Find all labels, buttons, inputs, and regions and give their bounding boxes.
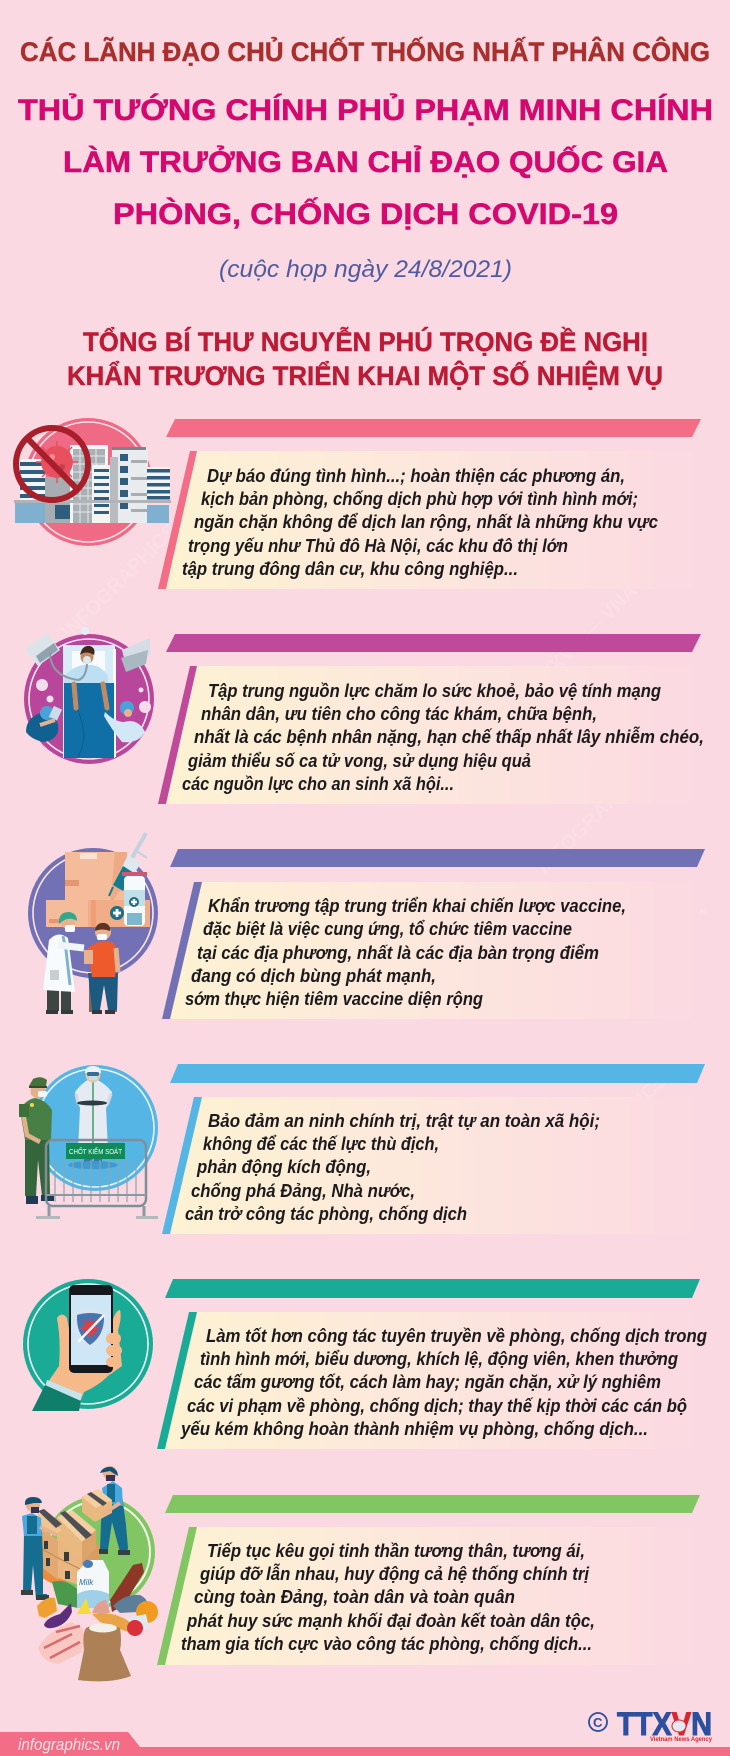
body text: phản động kích động, (196, 1156, 371, 1177)
body text: cùng toàn Đảng, toàn dân và toàn quân (194, 1586, 515, 1607)
subheading (67, 326, 663, 391)
icon: city with virus prohibition (14, 418, 171, 546)
body text (181, 1540, 595, 1654)
icon: workers with boxes and food: Milk (79, 1578, 94, 1587)
text box (170, 1097, 700, 1234)
colour bar (166, 419, 701, 437)
title: kicker: CÁC LÃNH ĐẠO CHỦ CHỐT THỐNG NHẤT PHÂN CÔNG (20, 35, 710, 67)
footer band (0, 1732, 730, 1756)
colour bar (166, 634, 701, 652)
body text: ngăn chặn không để dịch lan rộng, nhất là những khu vực (194, 511, 659, 532)
body text: giúp đỡ lẫn nhau, huy động cả hệ thống chính trị (199, 1563, 590, 1584)
date note: (cuộc họp ngày 24/8/2021) (219, 256, 512, 283)
text box (166, 666, 700, 804)
body text: đặc biệt là việc cung ứng, tổ chức tiêm vaccine (203, 918, 572, 939)
subheading: KHẨN TRƯƠNG TRIỂN KHAI MỘT SỐ NHIỆM VỤ (67, 359, 663, 391)
colour bar (165, 1279, 700, 1298)
left accent (162, 1097, 202, 1234)
body text: Dự báo đúng tình hình...; hoàn thiện các phương án, (207, 465, 625, 486)
body text: nhân dân, ưu tiên cho công tác khám, chữa bệnh, (201, 703, 597, 724)
title: main headline: LÀM TRƯỞNG BAN CHỈ ĐẠO QUỐC GIA (63, 145, 668, 179)
body text: tập trung đông dân cư, khu công nghiệp... (182, 558, 518, 579)
body text: phát huy sức mạnh khối đại đoàn kết toàn dân tộc, (186, 1610, 595, 1631)
body text: yếu kém không hoàn thành nhiệm vụ phòng, chống dịch... (180, 1418, 648, 1439)
icon: patient in hospital bed (24, 627, 154, 764)
logo: TTXVN: C (593, 1715, 603, 1730)
icon: checkpoint with guard and medic (19, 1065, 158, 1219)
icon: vaccination scene (28, 833, 158, 1014)
text box (166, 451, 700, 589)
body text: đang có dịch bùng phát mạnh, (191, 965, 436, 986)
body text (182, 680, 704, 794)
text: INFOGRAPHICS (548, 1070, 672, 1194)
left accent (158, 666, 197, 804)
subheading: TỔNG BÍ THƯ NGUYỄN PHÚ TRỌNG ĐỀ NGHỊ (83, 326, 648, 357)
body text: tình hình mới, biểu dương, khích lệ, động viên, khen thưởng (200, 1348, 678, 1369)
colour bar (170, 1064, 705, 1083)
panel 1: forecasting (158, 419, 701, 589)
body text: các nguồn lực cho an sinh xã hội... (182, 773, 454, 794)
body text: sớm thực hiện tiêm vaccine diện rộng (185, 988, 483, 1009)
icon: hand holding phone with shield (23, 1279, 153, 1411)
colour bar (170, 849, 705, 867)
body text (185, 895, 626, 1009)
text: INFOGRAPHICS (533, 755, 657, 879)
panel 5: communications (157, 1279, 707, 1449)
left accent (157, 1312, 197, 1449)
colour bar (165, 1495, 700, 1513)
text: TTXVN — VNA (28, 1105, 142, 1219)
body text: kịch bản phòng, chống dịch phù hợp với tình hình mới; (201, 488, 638, 509)
text: TTXVN — VNA (528, 580, 642, 694)
body text (182, 465, 659, 579)
body text: Khẩn trương tập trung triển khai chiến lược vaccine, (208, 895, 626, 916)
footer source: infographics.vn (18, 1735, 120, 1754)
body text: Tập trung nguồn lực chăm lo sức khoẻ, bảo vệ tính mạng (208, 680, 661, 701)
text box (165, 1312, 700, 1449)
left accent (162, 882, 202, 1019)
text: TTXVN — VNA (598, 900, 712, 1014)
body text: các tấm gương tốt, cách làm hay; ngăn chặn, xử lý nghiêm (194, 1371, 661, 1392)
left accent (157, 1527, 197, 1665)
panel 2: healthcare (158, 634, 704, 804)
body text: chống phá Đảng, Nhà nước, (191, 1180, 415, 1201)
text: INFOGRAPHICS (58, 520, 182, 644)
body text: giảm thiểu số ca tử vong, sử dụng hiệu quả (187, 750, 531, 771)
text box (165, 1527, 700, 1665)
body text: tham gia tích cực vào công tác phòng, chống dịch... (181, 1633, 592, 1654)
panel 6: solidarity (157, 1495, 700, 1665)
title: main headline: THỦ TƯỚNG CHÍNH PHỦ PHẠM MINH CHÍNH (18, 93, 713, 127)
title: main headline: PHÒNG, CHỐNG DỊCH COVID-19 (113, 197, 618, 231)
body text: không để các thế lực thù địch, (203, 1133, 439, 1154)
body text: Tiếp tục kêu gọi tinh thần tương thân, tương ái, (207, 1540, 585, 1561)
body text (180, 1325, 707, 1439)
logo: TTXVN: Vietnam News Agency (650, 1736, 712, 1743)
body text: cản trở công tác phòng, chống dịch (185, 1203, 467, 1224)
left accent (158, 451, 197, 589)
icon: checkpoint with guard and medic: CHỐT KIỂM SOÁT (69, 1146, 123, 1156)
body text: các vi phạm về phòng, chống dịch; thay thế kịp thời các cán bộ (187, 1395, 687, 1416)
title: main headline (18, 93, 713, 231)
body text: Bảo đảm an ninh chính trị, trật tự an toàn xã hội; (208, 1110, 600, 1131)
panel 4: security (162, 1064, 705, 1234)
panel 3: vaccine (162, 849, 705, 1019)
body text: tại các địa phương, nhất là các địa bàn trọng điểm (197, 942, 599, 963)
icon: workers with boxes and food (21, 1466, 158, 1681)
logo: TTXVN: TTXVN (617, 1706, 712, 1742)
body text (185, 1110, 600, 1224)
text box (170, 882, 700, 1019)
body text: trọng yếu như Thủ đô Hà Nội, các khu đô thị lớn (188, 535, 568, 556)
